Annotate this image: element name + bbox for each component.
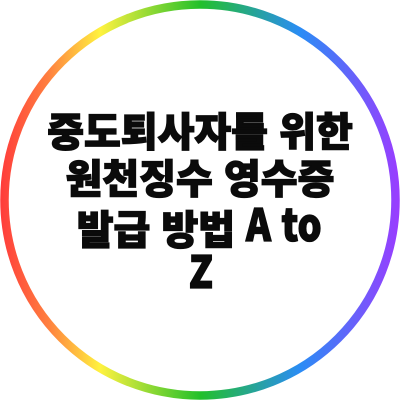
title: A to [246, 188, 322, 254]
title: Z [188, 236, 212, 301]
title [47, 100, 353, 301]
title: 발급 방법 [77, 198, 235, 256]
title: 중도퇴사자를 위한 [47, 100, 353, 158]
title: 원천징수 영수증 [66, 147, 334, 205]
